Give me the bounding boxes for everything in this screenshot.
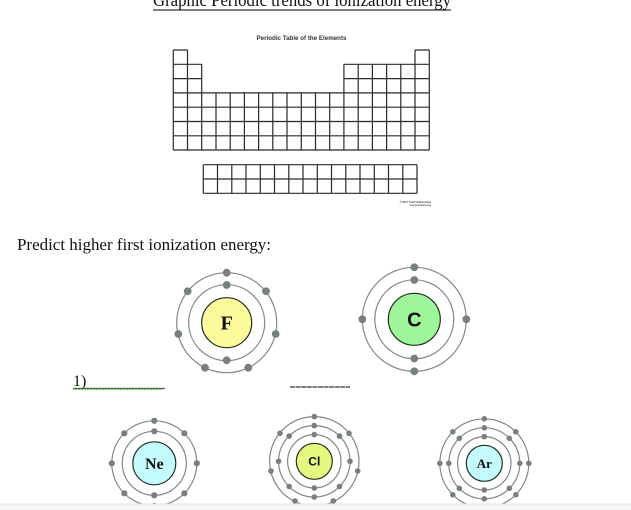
atom: neon: Ne: [145, 456, 164, 473]
atom: fluorine: F: [221, 312, 233, 334]
atom: carbon: C: [407, 310, 422, 332]
atom: fluorine: [174, 269, 280, 373]
atom: neon: [109, 418, 200, 509]
answer line 1: 1): [73, 373, 86, 390]
periodic table heading: Periodic Table of the Elements: [256, 36, 347, 42]
bottom edge bar: [0, 504, 631, 510]
answer line 2: [290, 386, 350, 388]
copyright note: [400, 200, 432, 207]
atom: argon: [437, 416, 532, 510]
atom: carbon: [358, 263, 470, 375]
copyright note: © 2017 Todd Helmenstine: [400, 200, 432, 204]
prompt text: Predict higher first ionization energy:: [17, 235, 271, 254]
main table grid: [173, 50, 429, 150]
copyright note: sciencenotes.org: [410, 203, 431, 207]
lanthanide and actinide grid: [203, 165, 417, 193]
atom: argon: Ar: [477, 456, 492, 471]
atom: chlorine: Cl: [308, 454, 320, 468]
atom: chlorine: [268, 414, 361, 506]
panel: periodic table: [173, 36, 432, 207]
answer line 1: [73, 373, 165, 390]
